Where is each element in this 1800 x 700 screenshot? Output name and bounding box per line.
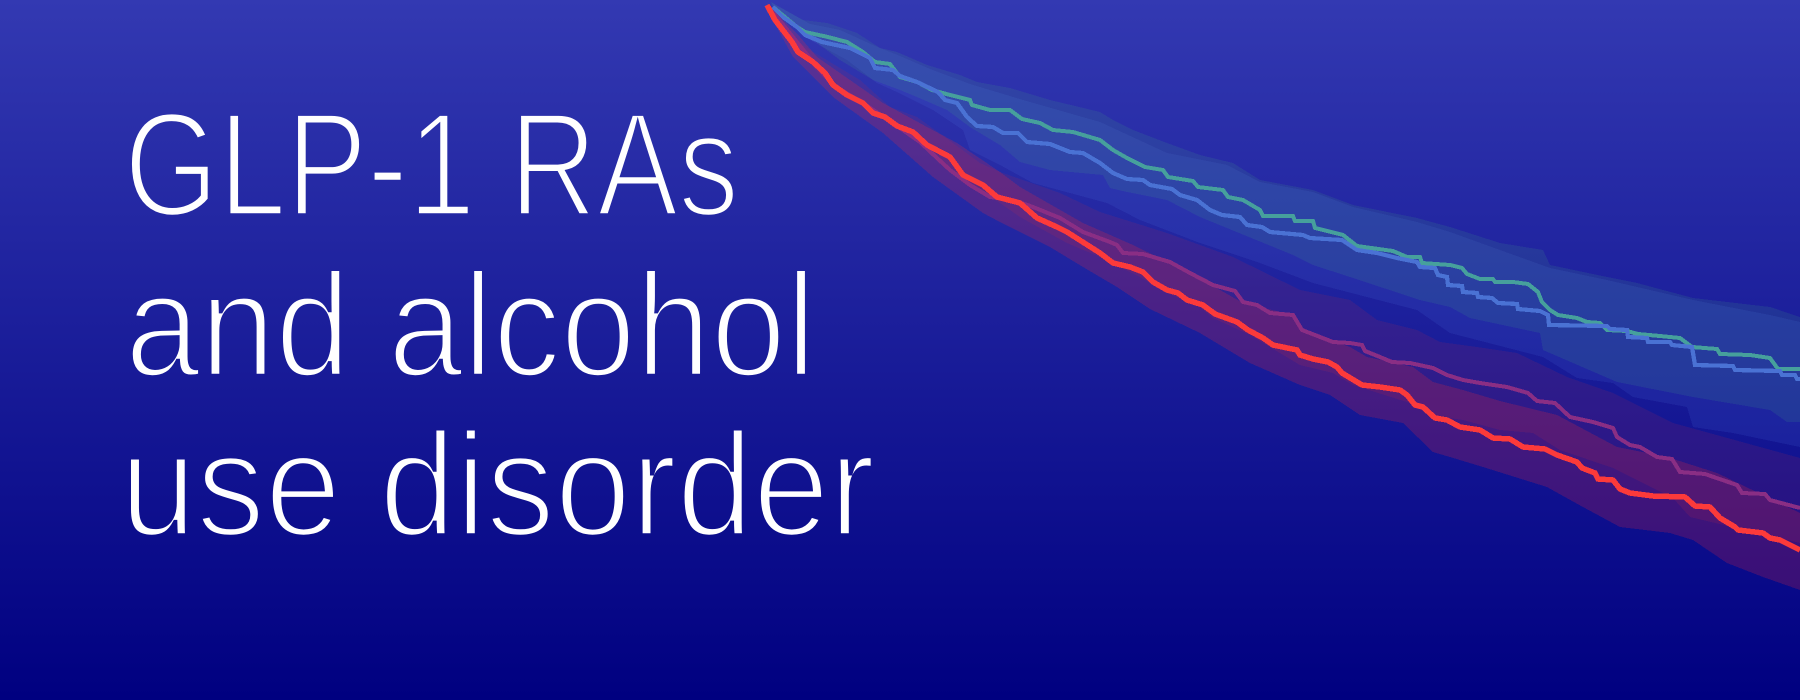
band: purple confidence interval — [768, 4, 1800, 543]
title: use disorder — [120, 402, 875, 568]
line: purple curve — [768, 6, 1800, 508]
chart: cumulative incidence curves with confidence bands — [767, 2, 1800, 590]
line: red curve — [767, 5, 1800, 550]
line: blue curve — [773, 7, 1800, 379]
band: blue confidence interval — [772, 3, 1800, 447]
band: red confidence interval — [767, 3, 1800, 590]
line: green curve — [773, 7, 1800, 369]
title: GLP-1 RAs — [124, 82, 739, 248]
title: and alcohol — [125, 243, 816, 408]
band: green confidence interval — [771, 2, 1800, 422]
title — [120, 82, 875, 568]
